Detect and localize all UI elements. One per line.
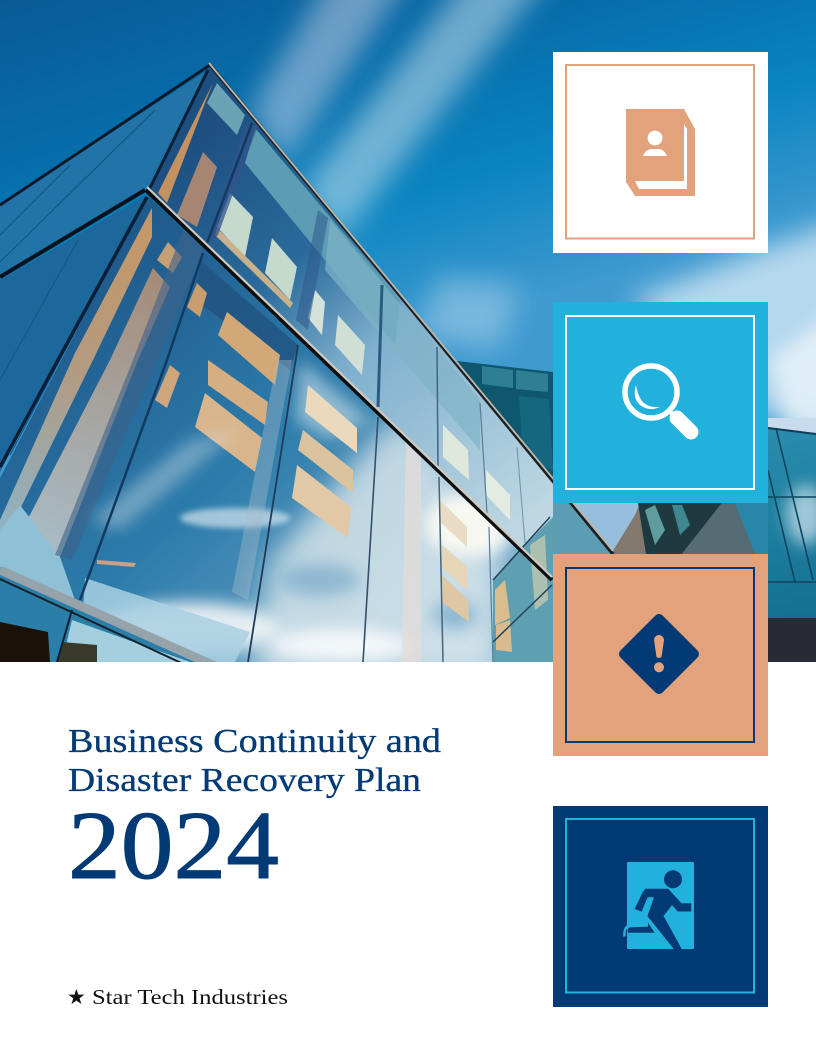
background building on the right: [457, 361, 816, 662]
icon: warning diamond: [617, 612, 701, 696]
left corner glass panels: [0, 70, 208, 472]
lower window band with sky and cloud reflections: [0, 195, 552, 680]
icon: magnifying glass: [625, 366, 691, 432]
year: 2024: [68, 792, 279, 899]
title: [68, 723, 441, 799]
card: emergency exit icon on navy: [553, 806, 768, 1007]
upper window band with interior reflections: [147, 65, 613, 600]
sky with wispy clouds: [0, 0, 816, 570]
icon: contact book: [626, 109, 695, 196]
building frame lines: [0, 63, 613, 667]
title: Business Continuity and: [68, 723, 441, 760]
lower-left glass below the frame: [0, 575, 194, 662]
icon: running person at exit door: [624, 862, 694, 949]
company name: ★: [67, 985, 86, 1009]
card: magnifying glass icon on light blue: [553, 302, 768, 503]
title: Disaster Recovery Plan: [68, 762, 421, 799]
reflected corner of neighbouring building: [493, 517, 553, 662]
card: warning icon on peach: [553, 554, 768, 756]
card: contact book icon on white: [553, 52, 768, 253]
hero photo: glass office building against blue sky: [0, 0, 816, 680]
company name: Star Tech Industries: [92, 985, 288, 1009]
